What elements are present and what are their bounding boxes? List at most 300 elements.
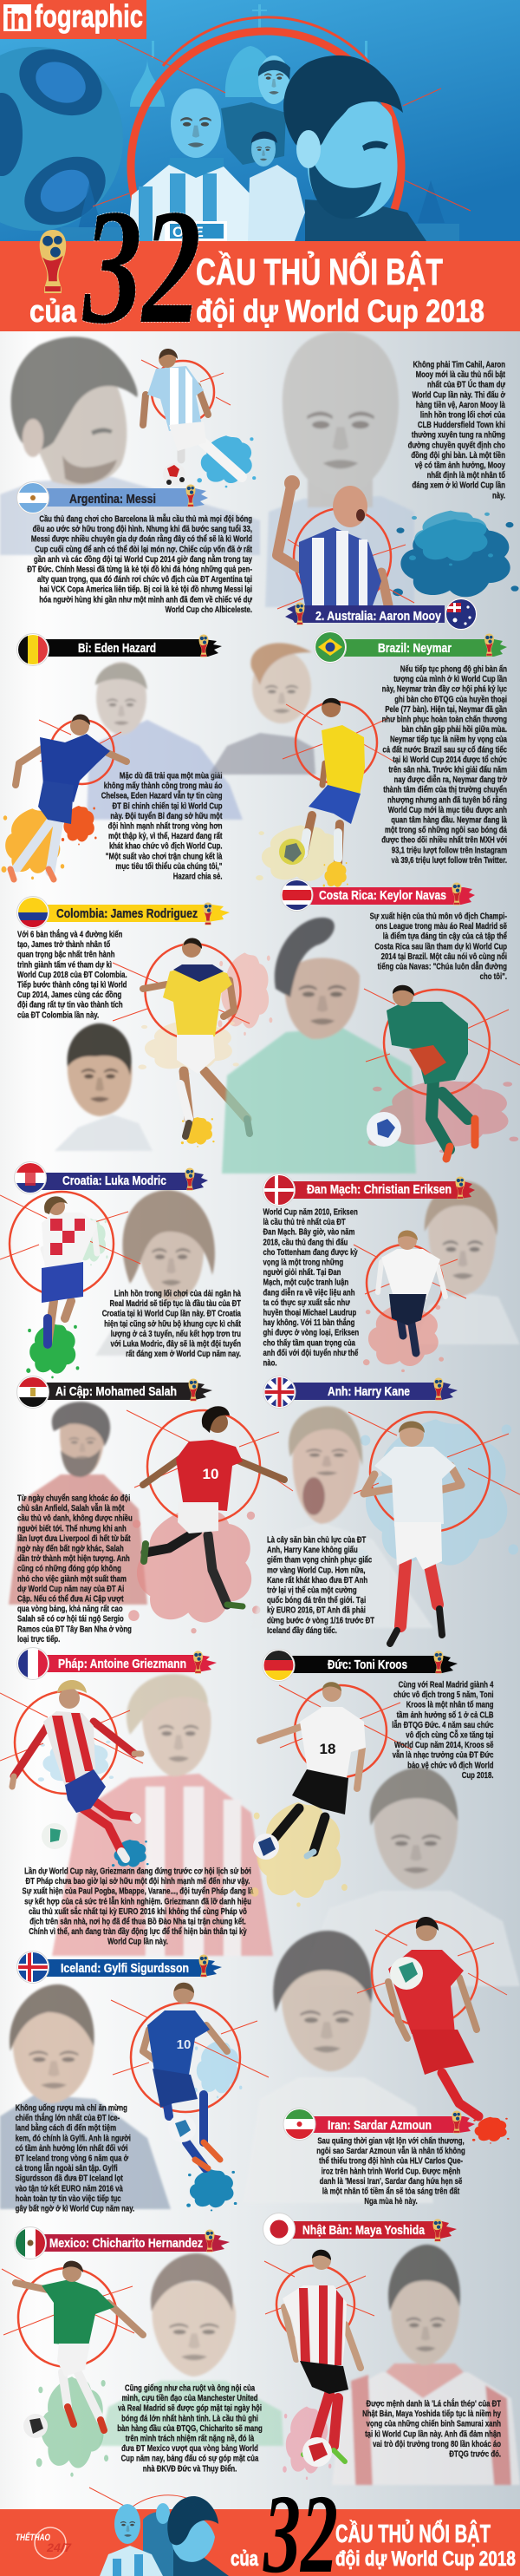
text block: Neymar tiếp tục là niềm hy vọng của: [390, 735, 508, 744]
text block: ngờ này đến bất ngờ khác, Salah: [17, 1544, 124, 1553]
text block: World Cup lần này.: [107, 1937, 168, 1946]
paint splash: [138, 952, 272, 1147]
text block: đồng đội ghi bàn. Là một tiền: [411, 450, 505, 460]
ghost portrait: [9, 1402, 147, 1605]
text block: World Cup năm 2010, Eriksen: [263, 1207, 358, 1217]
text block: nhất của ĐT Úc tham dự: [427, 379, 505, 389]
ghost portrait: [95, 1190, 234, 1356]
text block: Lần dự World Cup này, Griezmann đang đứng trước cơ hội lịch sử bởi: [24, 1867, 251, 1876]
paint splash: [472, 2117, 510, 2144]
text block: nhà ĐKVĐ Đức và Thụy Điển.: [143, 2463, 237, 2474]
football: [23, 2414, 48, 2438]
text block: 2018, cầu thủ đang thi đấu: [263, 1237, 348, 1247]
header red target ring: [87, 0, 471, 346]
text block: kem, đó chính là Gylfi. Anh là người: [16, 2133, 131, 2143]
label: England Kane: Anh: Harry Kane: [328, 1384, 410, 1399]
big number 32: 32: [82, 176, 201, 358]
label: Belgium Hazard: [17, 633, 222, 666]
text block: khát khao chức vô địch World Cup.: [109, 841, 222, 851]
text block: trở lại vị thế của một cường: [267, 1585, 357, 1595]
text block: Pele (77 bàn). Hiện tại, Neymar đã gần: [385, 704, 507, 714]
text block: Là cây săn bàn chủ lực của ĐT: [267, 1535, 367, 1545]
text block: lượng ở cả 3 tuyến, nếu kết hợp trơn tru: [111, 1329, 241, 1338]
text block: Anh, Harry Kane không giấu: [267, 1545, 358, 1554]
text block: Cup năm nay, bảng đấu có sự góp mặt của: [121, 2454, 259, 2463]
text block: cho thấy tầm quan trọng của: [263, 1337, 356, 1348]
football: [253, 1834, 279, 1860]
text block: Sau quãng thời gian vật lộn với chấn thương,: [317, 2136, 465, 2146]
Mooy: [127, 88, 258, 242]
text block: không mấy thành công trong màu áo: [104, 781, 223, 790]
label: Japan Yoshida: [263, 2213, 457, 2245]
text block: Mooy mới là cầu thủ nổi bật: [416, 369, 505, 379]
label: Colombia James: Colombia: James Rodriguez: [56, 906, 198, 921]
text block: với Luka Modric, đây sẽ là một đội tuyển: [110, 1339, 241, 1349]
paint splash: [256, 825, 347, 886]
label: Argentina Messi: Argentina: Messi: [69, 492, 156, 507]
player: Sigurdsson: [143, 1983, 227, 2168]
target ring: [0, 1192, 140, 1296]
player: Eriksen: [378, 1230, 445, 1353]
paint splash: [2, 806, 97, 879]
player: Salah: [143, 1406, 284, 1606]
text block: linh hồn trong lối chơi của: [420, 410, 506, 420]
text block: ons League trong màu áo Real Madrid sẽ: [375, 921, 507, 931]
text block: iroz trên hành trình World Cup. Được mệnh: [322, 2166, 460, 2176]
text block: dần trở thành một hiện tượng. Anh: [17, 1553, 130, 1563]
text block: kỳ EURO 2016, ĐT Anh đã phải: [267, 1605, 366, 1615]
text block: tạo, James trở thành nhân tố: [17, 939, 111, 949]
text block: tại kì World Cup lần này. Anh đã đảm nhận: [365, 2429, 501, 2439]
target ring: [111, 2000, 269, 2112]
player: Mooy: [277, 475, 388, 605]
text block: tiếng của Navas: "Chúa luôn dẫn đường: [378, 962, 507, 971]
text block: bàn hàng đầu của ĐTQG, Chicharito sẽ mang: [117, 2423, 263, 2433]
player: Messi: [143, 349, 242, 477]
player: Kroos: 18: [320, 1741, 335, 1757]
player: Modric: [42, 1196, 97, 1344]
text block: cho tôi".: [480, 971, 507, 981]
paint splash: [363, 1303, 444, 1372]
word của: của: [29, 293, 77, 329]
text block: Cup 2018.: [462, 1770, 494, 1780]
paint splash: [38, 1739, 149, 1870]
text block: danh là 'Messi Iran', Sardar đang hứa hẹn sẽ: [320, 2176, 462, 2186]
text block: địch trên sân nhà, nơi họ đã để thua Bồ Đào Nha tại trận chung kết.: [29, 1917, 246, 1926]
player: Sigurdsson: 10: [177, 2037, 191, 2052]
text block: thường xuyên tung ra những: [412, 430, 505, 440]
text block: này.: [492, 490, 505, 500]
text block: Nga mùa hè này.: [364, 2196, 418, 2206]
text block: Kroos là một nhân tố mang: [406, 1700, 494, 1710]
text block: ĐT Iceland trong vòng 6 năm qua ở: [16, 2154, 129, 2163]
label: Iran Azmoun: [283, 2108, 475, 2141]
panel: Costa Rica Navas: [222, 879, 520, 1174]
text block: nhất định là một nhân tố: [427, 470, 505, 480]
label: Denmark Eriksen: Đan Mạch: Christian Eriksen: [307, 1182, 452, 1197]
text block: Không phải Tim Cahil, Aaron: [413, 360, 505, 369]
panel: Iceland Sigurdsson: [0, 1952, 269, 2213]
text block: rất đáng xem ở World Cup năm nay.: [126, 1349, 241, 1358]
text block: vẫn là nhạc trưởng của ĐT Đức: [393, 1750, 494, 1760]
target ring: [39, 720, 121, 784]
label: Egypt Salah: [17, 1376, 212, 1409]
label: Germany Kroos: Đức: Toni Kroos: [328, 1657, 407, 1672]
text block: Mạch, một cuộc tranh luận: [263, 1278, 348, 1287]
paint splash: [355, 1419, 518, 1579]
text block: vào tận tứ kết EURO năm 2016 và: [16, 2183, 123, 2194]
ghost portrait: [100, 2253, 283, 2446]
target ring: [2, 2268, 134, 2367]
text block: lẫn ĐTQG Đức. 4 năm sau chức: [392, 1720, 494, 1729]
target ring: [364, 989, 520, 1095]
player: Griezmann: [12, 1680, 141, 1859]
text block: mơ vàng World Cup. Hơn nữa,: [267, 1565, 365, 1575]
text block: World Cup lần này. Thi đấu ở: [413, 389, 506, 400]
text block: đội hình mạnh nhất trong vòng hơn: [108, 821, 222, 831]
text block: ĐTQG trước đó.: [449, 2449, 501, 2459]
infographic tag: [0, 0, 146, 39]
text block: land bằng cách đi đến một tiệm: [16, 2122, 116, 2133]
text block: của ĐT Colombia lần này.: [17, 1010, 99, 1020]
player: Neymar: [303, 698, 365, 863]
text block: là cầu thủ trẻ nhất của ĐT: [263, 1217, 346, 1226]
text block: Từ ngày chuyển sang khoác áo đội: [17, 1494, 130, 1503]
ghost portrait: [299, 1768, 520, 1986]
footer band: [0, 2472, 520, 2576]
target ring: [113, 944, 250, 1039]
label: Mexico Hernandez: Mexico: Chicharito Hernandez: [49, 2236, 203, 2251]
football: [168, 2115, 196, 2142]
text block: Cup cuối cùng để anh có thể đòi lại món nợ. Chiếc cúp vốn đã ở rất: [35, 544, 252, 554]
text block: Kane rất khát khao đưa ĐT Anh: [267, 1575, 367, 1585]
text block: người giỏi nhất. Tại Đan: [263, 1267, 341, 1277]
text block: Với 6 bàn thắng và 4 đường kiến: [17, 928, 122, 939]
football: [390, 1957, 423, 1990]
text block: Ramos của ĐT Tây Ban Nha ở vòng: [17, 1624, 132, 1634]
panel: Germany Kroos: [250, 1650, 520, 1986]
text block: chiến thắng lớn nhất của ĐT Ice-: [16, 2112, 120, 2122]
panel: Colombia James: [17, 897, 272, 1151]
infographic tag: in: [6, 3, 29, 35]
Mooy: OPE: [172, 224, 204, 240]
text block: dự World Cup năm nay của ĐT Ai: [17, 1584, 124, 1593]
title band: [0, 176, 520, 358]
text block: nào.: [263, 1358, 277, 1368]
text block: một trong số những ngôi sao bóng đá: [385, 825, 507, 834]
player: Yoshida: [283, 2250, 361, 2462]
panel: Brazil Neymar: [209, 631, 508, 890]
label: Argentina Messi: [17, 482, 208, 513]
player: Hazard: [10, 714, 127, 879]
text block: qua vòng bảng, khả năng rất cao: [17, 1604, 123, 1613]
text block: trình giành tấm vé tham dự kì: [17, 959, 112, 970]
text block: World Cup mới là mục tiêu được anh: [388, 805, 507, 814]
text block: World Cup cho Albiceleste.: [166, 605, 252, 614]
text block: quan tâm hàng đầu. Neymar đang là: [391, 815, 507, 825]
football: [367, 1112, 401, 1147]
football: [302, 2437, 332, 2467]
text block: sự kết hợp của cả sức trẻ lẫn kinh nghiệm. Griezmann đã lỡ danh hiệu: [24, 1896, 251, 1906]
text block: ghi bàn cho ĐTQG của huyền thoại: [394, 694, 507, 704]
Neymar: [248, 131, 305, 241]
text block: Cup 2014, James cùng các đồng: [17, 990, 121, 999]
text block: cầu thủ vô danh, không được nhiều: [17, 1514, 133, 1523]
player: Kane: [364, 1421, 461, 1644]
text block: Salah sẽ có cơ hội tái ngộ Sergio: [17, 1614, 124, 1624]
text block: anh đối với đội tuyển như thế: [263, 1348, 358, 1357]
label: Japan Yoshida: Nhật Bản: Maya Yoshida: [302, 2223, 426, 2238]
text block: Cùng với Real Madrid giành 4: [399, 1680, 494, 1690]
football: [42, 1823, 68, 1849]
text block: đường chuyền quyết định cho: [408, 440, 505, 450]
text block: như bình phục hoàn toàn chấn thương: [382, 715, 507, 724]
text block: là một nhân tố tiềm ẩn sẽ tỏa sáng trên đất: [322, 2187, 459, 2196]
text block: Sự xuất hiện của thủ môn vô địch Champi-: [370, 912, 507, 921]
panel: Egypt Salah: [9, 1376, 293, 1644]
text block: cũng có những đóng góp không: [17, 1564, 121, 1573]
text block: gây bất ngờ ở kì World Cup năm nay.: [16, 2204, 134, 2213]
label: Australia Mooy: 2. Australia: Aaron Mooy: [315, 609, 442, 624]
label: Egypt Salah: Ai Cập: Mohamed Salah: [55, 1384, 177, 1399]
text block: vọng của những chiến binh Samurai xanh: [367, 2419, 501, 2429]
text block: Mặc dù đã trải qua một mùa giải: [120, 771, 222, 781]
text block: Hazard chia sẻ.: [173, 872, 222, 881]
ghost portrait: [222, 918, 416, 1174]
paint splash: [197, 435, 256, 487]
text block: bảo vệ chức vô địch World: [407, 1760, 494, 1770]
text block: huyền thoại Michael Laudrup: [263, 1308, 357, 1317]
label: England Kane: [263, 1376, 458, 1409]
player: Kroos: [257, 1682, 366, 1856]
text block: Được mệnh danh là 'Lá chắn thép' của ĐT: [366, 2397, 501, 2409]
text block: mục tiêu tối thiểu của chúng tôi,": [115, 861, 222, 871]
label: France Griezmann: Pháp: Antoine Griezmann: [58, 1657, 186, 1671]
text block: dừng bước ở vòng 1/16 trước ĐT: [267, 1615, 374, 1625]
text block: ĐT Bỉ chinh chiến tại kì World Cup: [112, 801, 223, 811]
footer word của: của: [231, 2547, 259, 2571]
paint splash: [36, 2377, 108, 2477]
panel: Belgium Hazard: [2, 633, 243, 881]
text block: ngôi sao Sardar Azmoun vẫn là nhân tố không: [316, 2146, 465, 2155]
text block: CLB Huddersfield Town khi: [418, 420, 505, 429]
player: James: [143, 938, 250, 1136]
text block: Costa Rica sau lần tham dự kì World Cup: [374, 941, 507, 951]
text block: được theo dõi nhiều nhất trên MXH với: [381, 835, 507, 845]
football: [163, 463, 185, 486]
text block: bàn chân gặp phải hồi giữa mùa.: [401, 724, 507, 734]
label: Colombia James: [17, 897, 230, 928]
paint splash: [368, 1079, 518, 1153]
player: Navas: [387, 985, 475, 1159]
target ring: [277, 508, 414, 609]
header banner: [0, 0, 520, 346]
label: Costa Rica Navas: [281, 879, 475, 911]
text block: quốc bóng đá trên thế giới. Tại: [267, 1595, 366, 1605]
text block: này. Đội tuyển Bỉ đang sở hữu một: [110, 811, 223, 821]
text block: Croatia tại kì World Cup lần này. ĐT Croatia: [102, 1309, 242, 1318]
header players: [127, 56, 426, 242]
text block: ĐT Pháp chưa bao giờ lại sở hữu một đội hình mạnh mẽ đến như vậy.: [26, 1876, 250, 1886]
panel: Denmark Eriksen: [263, 1174, 520, 1372]
label: Mexico Hernandez: [14, 2227, 230, 2259]
text block: ta có thực sự xuất sắc như: [263, 1297, 350, 1307]
text block: Nếu tiếp tục phong độ ghi bàn ấn: [400, 664, 507, 674]
label: Iran Azmoun: Iran: Sardar Azmoun: [328, 2118, 432, 2133]
text block: Nhật Bản, Maya Yoshida tiếp tục là niềm hy: [362, 2409, 501, 2418]
Hazard: [221, 56, 290, 165]
text block: trên sân nhà. Trước khi giải đấu năm: [388, 765, 507, 775]
text block: "Một suất vào chơi trận chung kết là: [106, 851, 223, 861]
text block: Real Madrid sẽ tiếp tục là đầu tàu của ĐT: [110, 1298, 241, 1308]
text block: Chelsea, Eden Hazard vẫn tự tin cùng: [101, 791, 222, 801]
text block: này, Neymar tràn đầy cơ hội phá kỷ lục: [382, 684, 507, 694]
text block: Iceland đầy đáng tiếc.: [267, 1625, 337, 1635]
paint splash: [128, 1507, 260, 1633]
text block: mình, cựu tiền đạo của Manchester United: [121, 2393, 258, 2403]
text block: đáng xem ở kì World Cup lần: [412, 481, 505, 490]
target ring: [0, 1691, 143, 1794]
text block: một thập kỷ, vì thế, Hazard đang rất: [108, 831, 223, 840]
text block: Tiếp bước thành công tại kì World: [17, 980, 127, 990]
player: Salah: 10: [203, 1466, 218, 1482]
text block: tầm ảnh hưởng số 1 ở cả CLB: [397, 1710, 494, 1720]
text block: World Cup 2018 của ĐT Colombia.: [17, 970, 127, 979]
icon: trophy: [40, 230, 66, 293]
text block: Messi được nhiều chuyên gia dự đoán rằng đây có thể sẽ là kì World: [31, 533, 252, 544]
text block: 93,1 triệu lượt follow trên Instagram: [392, 845, 507, 855]
text block: nhượng nhưng anh đã tuyên bố rằng: [387, 794, 507, 805]
text block: Linh hồn trong lối chơi của dải ngân hà: [114, 1289, 241, 1298]
text block: trên mình trách nhiệm rất nặng nề, đó là: [126, 2434, 254, 2443]
ghost portrait: [0, 1984, 171, 2209]
ghost portrait: [414, 1181, 520, 1344]
footer logo: [16, 2527, 72, 2559]
text block: vai trò đội trưởng trong 80 lần khoác áo: [373, 2439, 501, 2449]
title line 1: CẦU THỦ NỔI BẬT: [196, 250, 443, 293]
label: Croatia Modric: [14, 1162, 208, 1193]
text block: quan trọng bậc nhất trên hành: [17, 950, 114, 959]
text block: vô địch cùng Cỗ xe tăng tại: [406, 1730, 494, 1740]
panel: France Griezmann: [0, 1648, 273, 1956]
text block: hai VCK Copa America liên tiếp. Bị coi là kẻ tội đồ nhưng Messi lại: [39, 585, 252, 594]
text block: ghi được ở vòng loại, Eriksen: [263, 1328, 359, 1337]
text block: hóa người hùng khi gần như một mình anh đã đem về chiếc vé dự: [39, 594, 252, 605]
footer players: [100, 2496, 229, 2576]
text block: có tầm ảnh hưởng lớn nhất đối với: [16, 2143, 128, 2153]
text block: và 39,6 triệu lượt follow trên Twitter.: [392, 855, 507, 865]
target ring: [141, 360, 231, 423]
ghost portrait: [332, 2245, 520, 2485]
target ring: [264, 2261, 374, 2344]
ghost portrait: [0, 337, 260, 555]
text block: hiện tại cũng sở hữu bộ khung cực kì chất: [104, 1318, 241, 1329]
label: Australia Mooy: [285, 598, 477, 630]
panel: Mexico Hernandez: [2, 2227, 283, 2477]
football: [279, 839, 305, 865]
paint splash: [283, 2406, 331, 2480]
target ring: [348, 1412, 520, 1532]
label: Croatia Modric: Croatia: Luka Modric: [62, 1174, 166, 1188]
text block: thể thiếu trong đội hình của HLV Carlos Que-: [319, 2156, 463, 2166]
text block: nay được diễn ra, Neymar đang trở: [393, 775, 508, 784]
text block: đưa ĐT Mexico vượt qua vòng bảng World: [121, 2443, 258, 2453]
text block: Cầu thủ đang chơi cho Barcelona là mẫu cầu thủ mà mọi đội bóng: [39, 514, 252, 524]
ghost portrait: [243, 1931, 433, 2203]
text block: là điểm tựa đáng tin cậy của cả tập thể: [383, 932, 507, 941]
label: Denmark Eriksen: [263, 1174, 475, 1206]
text block: tại kì World Cup 2014 được tổ chức: [393, 755, 507, 764]
text block: hàng tiền vệ, Aaron Mooy là: [416, 400, 505, 409]
text block: Cập. Nếu có thể đưa Ai Cập vượt: [17, 1594, 124, 1604]
player: Azmoun: [388, 1917, 478, 2116]
text block: thành tâm điểm của thị trường chuyển: [383, 785, 507, 794]
text block: Không uống rượu mà chỉ ăn mừng: [16, 2103, 127, 2113]
text block: nhỏ cho việc giành một suất tham: [17, 1573, 127, 1584]
text block: giếm tham vọng chinh phục giấc: [267, 1555, 372, 1565]
kremlin domes: [61, 4, 459, 245]
text block: đội đang rất tự tin vào thành tích: [17, 1000, 123, 1010]
target ring: [354, 1245, 466, 1321]
text block: cả đất nước Brazil sau sự cố đáng tiếc: [382, 744, 507, 755]
paint splash: [26, 1219, 108, 1378]
label: Brazil Neymar: Brazil: Neymar: [378, 641, 452, 656]
panel: Japan Yoshida: [263, 2213, 520, 2485]
text block: Sigurdsson đã đưa ĐT Iceland lọt: [16, 2174, 123, 2183]
text block: 2014 tại Brazil. Một câu nói vô cùng nổi: [381, 951, 507, 961]
panel: Croatia Modric: [0, 1162, 242, 1378]
text block: loại trực tiếp.: [17, 1634, 60, 1644]
text block: ĐT Đức. Chính Messi đã từng là kẻ tội đồ khi đá hỏng những quả pen-: [27, 565, 252, 574]
ghost portrait: [209, 643, 315, 775]
text block: đều ao ước sở hữu trong đội hình. Nhưng khi đã bước sang tuổi 33,: [33, 524, 252, 533]
Messi: [283, 56, 426, 241]
text block: Đan Mạch. Bây giờ, vào năm: [263, 1227, 354, 1237]
ghost portrait: [52, 1674, 273, 1956]
paint splash: [250, 1802, 348, 1907]
panel: Australia Mooy: [265, 331, 518, 630]
text block: và Real Madrid sẽ được góp mặt tại ngày hội: [118, 2403, 262, 2413]
footer logo: 24/7: [46, 2540, 72, 2554]
target ring: [127, 1410, 293, 1523]
text block: vọng là một trong những: [263, 1258, 343, 1267]
footer logo: THỂTHAO: [16, 2532, 50, 2543]
text block: lần lượt đưa Liverpool đi hết từ bất: [17, 1533, 131, 1543]
text block: cả trong lẫn ngoài sân tập. Gylfi: [16, 2163, 118, 2173]
text block: cầu thủ xuất sắc nhất tại kỳ EURO 2016 khi không thể cùng Pháp vô: [29, 1906, 247, 1916]
text block: Chính vì thế, anh đang tràn đầy động lực để thể hiện bản thân tại kỳ: [29, 1926, 247, 1936]
target ring: [357, 1920, 507, 2026]
label: Brazil Neymar: [314, 631, 507, 663]
text block: World Cup năm 2014, Kroos sẽ: [394, 1740, 494, 1749]
text block: bóng đá lớn nhất hành tinh. Là cầu thủ ghi: [121, 2413, 258, 2423]
text block: cho Tottenham đang được kỳ: [263, 1247, 358, 1257]
text block: người biết tới. Thế nhưng khi anh: [17, 1523, 127, 1533]
text block: đang diễn ra về việc liệu anh: [263, 1287, 355, 1298]
ghost portrait: [251, 1407, 433, 1628]
emblem: world cup ball: [0, 36, 123, 239]
text block: alty quan trọng, qua đó đánh rơi chức vô địch của ĐT Argentina tại: [37, 574, 252, 584]
panel: Argentina Messi: [0, 337, 260, 614]
paint splash: [186, 2041, 242, 2211]
label: Germany Kroos: [263, 1650, 458, 1681]
target ring: [279, 1685, 412, 1777]
text block: Sự xuất hiện của Paul Pogba, Mbappe, Varane..., đội tuyển Pháp đang là: [22, 1886, 254, 1896]
text block: chức vô địch trong 5 năm, Toni: [393, 1690, 494, 1699]
ghost portrait: [55, 1023, 153, 1151]
label: Belgium Hazard: Bỉ: Eden Hazard: [78, 641, 156, 656]
paint splash: [393, 511, 518, 605]
